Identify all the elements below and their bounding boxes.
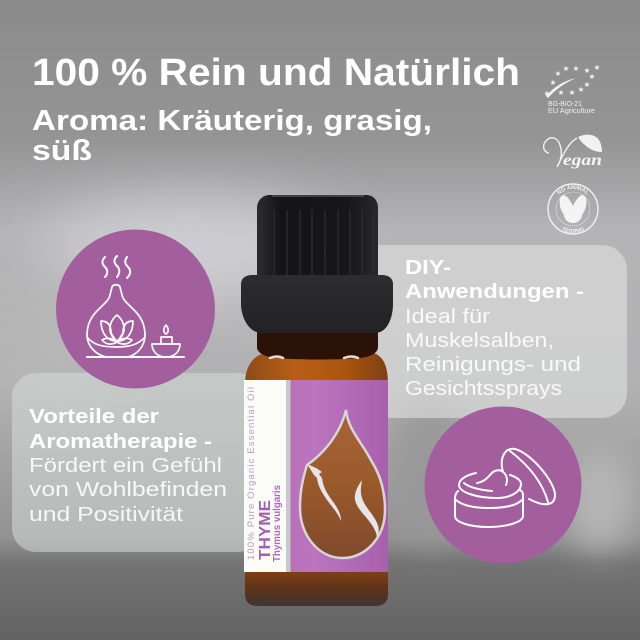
badge: EU organic leaf: ★ xyxy=(573,64,580,73)
heading: Vorteile der Aromatherapie xyxy=(29,406,212,453)
badge: EU organic leaf: ★ xyxy=(550,78,557,87)
heading: Vorteile der Aromatherapie: Aromatherapie - xyxy=(29,431,212,453)
badge: EU organic leaf: ★ xyxy=(594,63,601,72)
cap xyxy=(241,195,393,333)
drop emblem xyxy=(300,410,385,558)
label text: Thymus vulgaris xyxy=(271,485,283,562)
text: aromatherapy benefit: Fördert ein Gefühl xyxy=(29,455,222,477)
icon circle: aromatherapy diffuser xyxy=(56,230,215,388)
bottle shoulder xyxy=(245,347,388,385)
heading: Vorteile der Aromatherapie: Vorteile der xyxy=(29,406,159,428)
badge: no animal testing: TESTING xyxy=(562,226,584,233)
icon circle: cream jar xyxy=(424,406,582,564)
heading: DIY-Anwendungen: DIY- xyxy=(405,257,451,279)
text: DIY uses: Muskelsalben, xyxy=(405,330,554,352)
badge: no animal testing: NO ANIMAL xyxy=(556,185,588,194)
badge: EU organic leaf: ★ xyxy=(589,72,596,81)
text: DIY uses: Reinigungs- und xyxy=(405,354,581,376)
label xyxy=(244,380,388,572)
badge: EU organic leaf: ★ xyxy=(555,69,562,78)
text: aromatherapy benefit xyxy=(29,455,227,526)
badge: EU organic leaf: ★ xyxy=(544,89,551,98)
heading: DIY-Anwendungen xyxy=(405,257,584,303)
badge: EU organic leaf xyxy=(544,63,601,115)
label text xyxy=(246,387,283,562)
badge: EU organic leaf: BG-BIO-21 xyxy=(548,99,582,108)
badge: vegan: egan xyxy=(563,152,602,169)
panel: DIY applications xyxy=(370,245,627,418)
badge: EU organic leaf: ★ xyxy=(584,80,591,89)
badge: no animal testing xyxy=(547,183,599,235)
label text: 100% Pure Organic Essential Oil xyxy=(246,387,257,560)
badge: EU organic leaf: EU Agriculture xyxy=(548,106,595,115)
badge: vegan xyxy=(544,135,602,169)
text: aromatherapy benefit: von Wohlbefinden xyxy=(29,479,227,501)
neck xyxy=(257,332,378,360)
badge: EU organic leaf: ★ xyxy=(563,64,570,73)
text: aromatherapy benefit: und Positivität xyxy=(29,504,184,526)
subtitle: Aroma: Kräuterig, grasig, xyxy=(32,105,432,137)
text: DIY uses: Gesichtssprays xyxy=(405,378,562,400)
badge: EU organic leaf: ★ xyxy=(569,88,576,97)
bottle xyxy=(241,195,393,606)
subtitle xyxy=(32,105,432,167)
label text: THYME xyxy=(257,500,274,560)
badge: EU organic leaf: ★ xyxy=(578,85,585,94)
text: DIY uses xyxy=(405,306,581,400)
panel: aromatherapy xyxy=(12,373,262,552)
title: 100 % Rein und Natürlich xyxy=(32,52,520,94)
collar xyxy=(241,275,393,333)
text: DIY uses: Ideal für xyxy=(405,306,490,328)
badge: EU organic leaf: ★ xyxy=(558,88,565,97)
bottle base xyxy=(245,565,388,606)
badge: EU organic leaf: ★ xyxy=(584,66,591,75)
heading: DIY-Anwendungen: Anwendungen - xyxy=(405,281,584,303)
subtitle: süß xyxy=(32,135,92,167)
